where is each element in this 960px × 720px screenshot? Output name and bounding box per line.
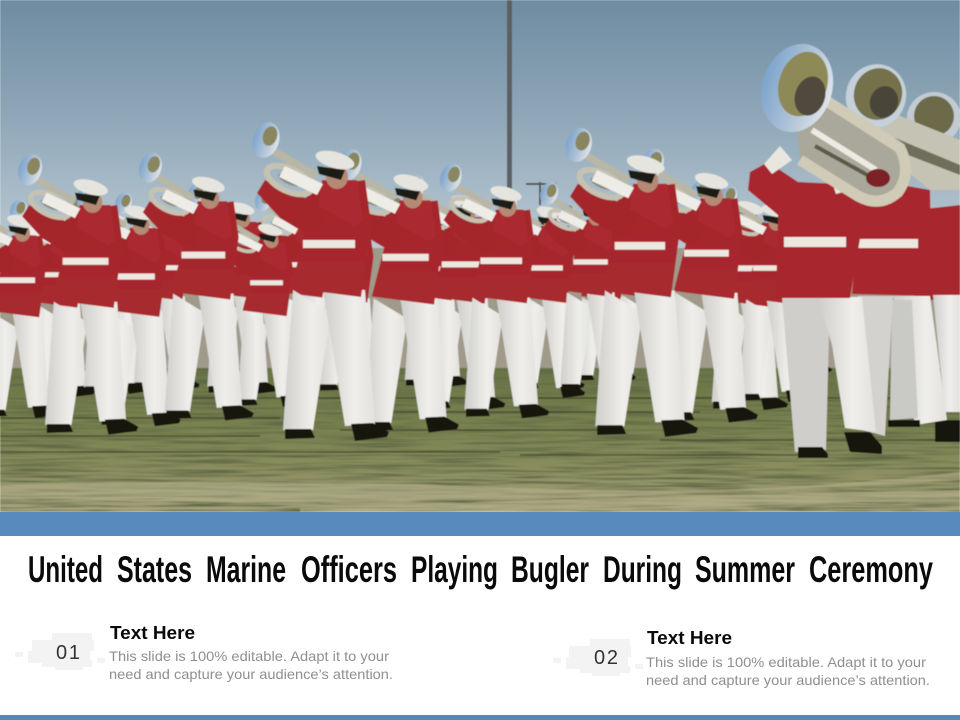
description 01: need and capture your audience’s attention. — [109, 666, 393, 682]
back rank of marchers — [7, 181, 832, 397]
description 02: need and capture your audience’s attention. — [646, 672, 930, 688]
title: During — [603, 549, 682, 590]
far right marcher — [915, 205, 960, 442]
distant ground band — [0, 248, 960, 374]
middle rank of marchers — [0, 172, 812, 426]
field grass — [0, 368, 960, 512]
description 02: This slide is 100% editable. Adapt it to your — [646, 654, 926, 670]
heading 01: Text Here — [110, 623, 195, 643]
number badge 01 — [15, 633, 105, 670]
number badge 01: 01 — [56, 642, 80, 664]
title: Marine — [206, 549, 286, 590]
title: Playing — [411, 549, 498, 590]
description 01: This slide is 100% editable. Adapt it to your — [109, 648, 389, 664]
item 01 — [15, 623, 393, 682]
heading 02: Text Here — [647, 628, 732, 648]
title: Summer — [695, 549, 795, 590]
number badge 02 — [553, 639, 643, 676]
title: States — [117, 549, 192, 590]
utility pole — [507, 0, 512, 195]
distant pole — [526, 182, 556, 205]
front rank of marchers — [14, 119, 758, 441]
title: Officers — [301, 549, 397, 590]
number badge 02: 02 — [594, 647, 618, 669]
sky — [0, 0, 960, 300]
tuba: second — [838, 56, 960, 190]
item 02 — [553, 628, 930, 688]
right marcher with tuba — [844, 178, 947, 454]
blue band under photo — [0, 512, 960, 536]
title: United — [28, 549, 103, 590]
bottom blue bar — [0, 715, 960, 720]
tuba: lead — [750, 34, 906, 201]
lead marcher with tuba — [748, 146, 876, 458]
tuba: third — [905, 92, 960, 190]
title: Bugler — [511, 549, 589, 590]
photo: marine band on field — [0, 0, 960, 512]
